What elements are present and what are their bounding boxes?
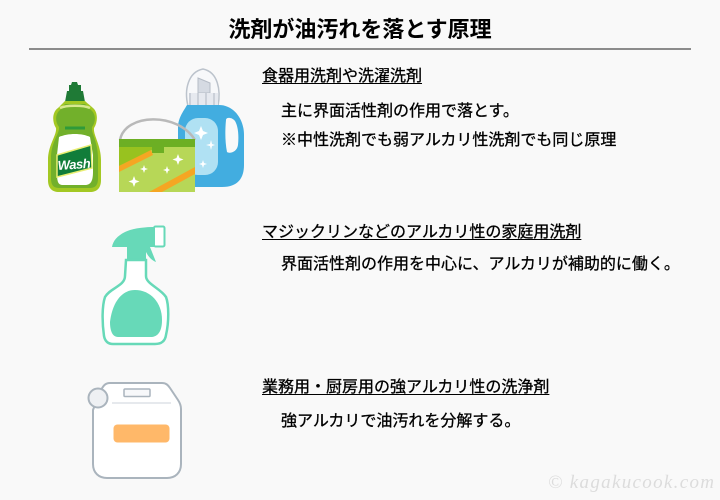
- text block: alkaline household detergent: 界面活性剤の作用を中心に、アルカリが補助的に働く。: [281, 256, 680, 273]
- icon: green dish soap bottle: [48, 82, 101, 192]
- text block: commercial strong alkaline detergent: 強アルカリで油汚れを分解する。: [281, 413, 520, 430]
- icon: green sponge basket: [119, 119, 195, 192]
- icon: commercial canister: [88, 383, 181, 478]
- text block: dish and laundry detergent: 主に界面活性剤の作用で落とす。: [281, 103, 519, 120]
- icon: detergent bottles: [48, 69, 244, 192]
- text block: dish and laundry detergent: [281, 102, 616, 149]
- icon: spray bottle: [103, 226, 168, 344]
- title: 洗剤が油汚れを落とす原理: [228, 17, 492, 42]
- icon: green dish soap bottle: Wash: [57, 156, 91, 173]
- icon: blue laundry bottle: [178, 69, 244, 187]
- heading: commercial strong alkaline detergent: 業務用・厨房用の強アルカリ性の洗浄剤: [262, 379, 549, 396]
- heading: dish and laundry detergent: 食器用洗剤や洗濯洗剤: [262, 68, 422, 85]
- watermark: © kagakucook.com: [548, 472, 714, 493]
- heading: alkaline household detergent: マジックリンなどのアルカリ性の家庭用洗剤: [262, 224, 581, 241]
- text block: dish and laundry detergent: ※中性洗剤でも弱アルカリ性洗剤でも同じ原理: [281, 132, 616, 149]
